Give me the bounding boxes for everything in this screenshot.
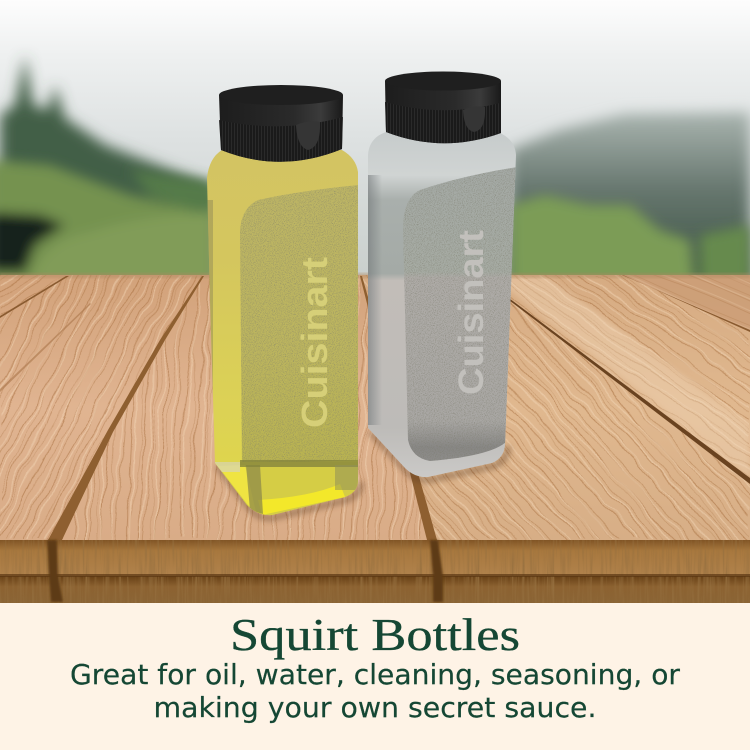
caption panel	[0, 603, 750, 750]
shadow	[217, 466, 361, 518]
bottle cap: oil	[219, 85, 343, 162]
title: Squirt Bottles	[230, 610, 520, 660]
light streak along plank edge	[490, 275, 750, 478]
bottle: clear	[360, 125, 525, 480]
plank gaps	[0, 275, 750, 540]
description: making your own secret sauce.	[154, 691, 596, 724]
background: misty hills	[0, 0, 750, 285]
bottle cap: clear	[385, 72, 501, 143]
shadow	[370, 432, 508, 480]
table top planks	[0, 273, 750, 540]
label panel	[403, 167, 518, 461]
body	[207, 150, 358, 516]
lower rail	[0, 574, 750, 603]
wooden table	[0, 273, 750, 603]
oil base	[215, 460, 358, 516]
body	[368, 132, 516, 478]
wordmark: Cuisinart	[452, 230, 491, 395]
description	[70, 658, 680, 724]
bottle: oil	[200, 145, 365, 520]
label panel	[240, 185, 360, 464]
plank front face	[0, 540, 750, 576]
description: Great for oil, water, cleaning, seasoning, or	[70, 658, 680, 691]
wordmark: Cuisinart	[294, 257, 335, 428]
vertical plank joints	[47, 540, 443, 602]
